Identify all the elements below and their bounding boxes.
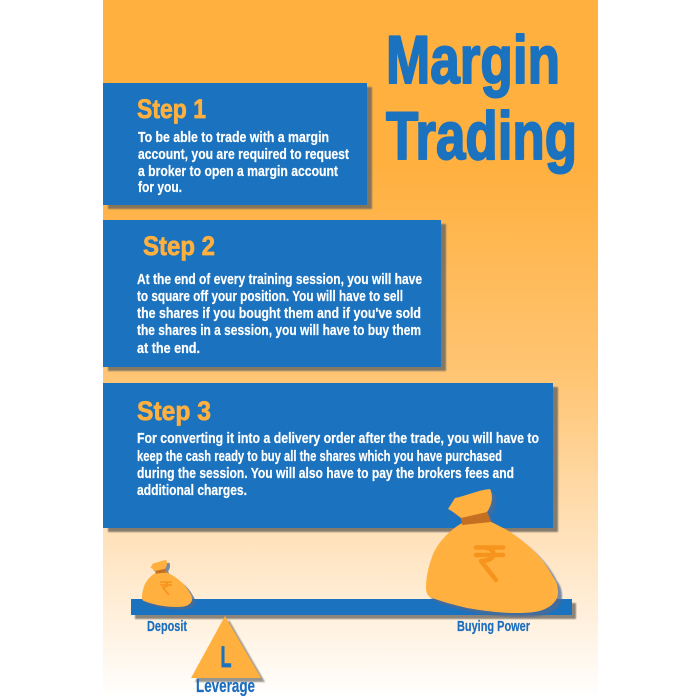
panel: step 2: to square off your position. You will have to sell — [137, 289, 403, 305]
panel: step 2: At the end of every training session, you will have — [137, 272, 422, 288]
title — [386, 22, 577, 174]
label: buying power: Buying Power — [457, 619, 530, 635]
panel: step 1: To be able to trade with a margin — [138, 130, 329, 146]
panel: step 2: the shares if you bought them and if you've sold — [137, 306, 421, 322]
label: deposit: Deposit — [147, 619, 187, 635]
icon: small money bag — [142, 560, 195, 610]
panel: step 1 — [103, 83, 372, 209]
label: leverage: Leverage — [196, 676, 255, 696]
panel: step 2: Step 2 — [143, 231, 215, 261]
title: Trading — [386, 98, 577, 174]
panel: step 3: during the session. You will also have to pay the brokers fees and — [137, 466, 514, 482]
panel: step 3: Step 3 — [137, 396, 211, 426]
panel: step 3: additional charges. — [137, 483, 247, 499]
icon: large money bag — [426, 489, 562, 617]
scale beam — [131, 599, 576, 619]
panel: step 2 — [103, 220, 446, 371]
icon: leverage fulcrum — [191, 616, 265, 682]
panel: step 1: a broker to open a margin account — [138, 164, 338, 180]
panel: step 1: account, you are required to request — [138, 147, 349, 163]
panel: step 2: the shares in a session, you will have to buy them — [137, 323, 421, 339]
icon: leverage fulcrum: L — [220, 641, 232, 674]
panel: step 3: For converting it into a delivery order after the trade, you will have to — [137, 431, 539, 447]
panel: step 1: Step 1 — [137, 94, 206, 124]
background panel — [103, 0, 598, 700]
panel: step 2: at the end. — [137, 341, 200, 357]
panel: step 3: keep the cash ready to buy all the shares which you have purchased — [137, 449, 502, 465]
panel: step 1: for you. — [138, 180, 182, 196]
panel: step 3 — [103, 383, 558, 532]
title: Margin — [386, 22, 560, 98]
